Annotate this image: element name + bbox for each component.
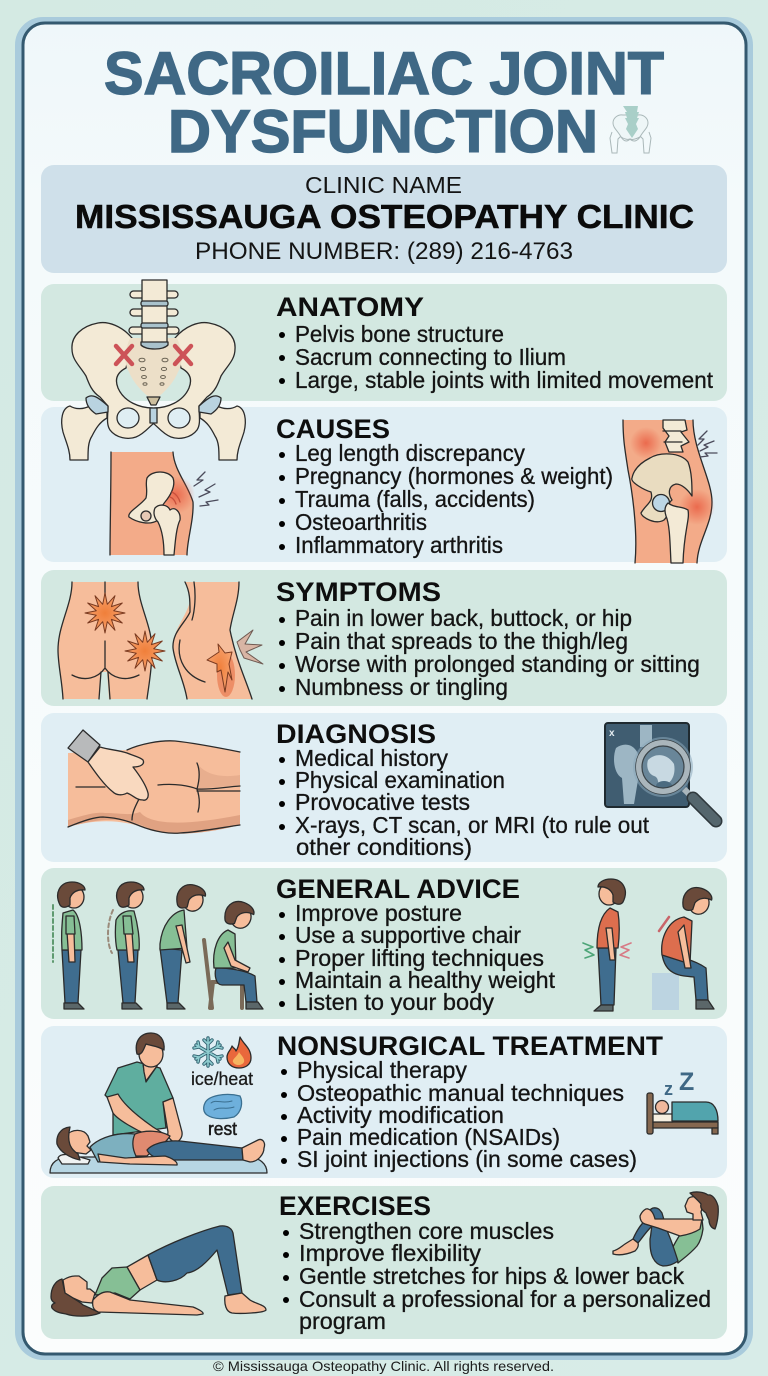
icon: snowflake [194, 1038, 222, 1066]
icon: sleeping in bed: z [664, 1079, 673, 1099]
icon: small pelvis [610, 106, 651, 153]
list: nonsurgical treatment: Activity modification [297, 1102, 504, 1128]
magnifier [633, 737, 716, 821]
hand [88, 747, 148, 800]
list: causes: Osteoarthritis [295, 509, 427, 535]
pain burst: lower back [85, 593, 125, 633]
illustration: hip side view, left [110, 452, 218, 555]
panel: clinic info [41, 165, 727, 273]
title: DYSFUNCTION [168, 98, 598, 165]
list: general advice [279, 900, 556, 1015]
title: SACROILIAC JOINT [104, 40, 664, 107]
illustration: x-ray with magnifying glass: x [609, 728, 615, 739]
figure: bending posture [160, 882, 207, 1009]
panel: anatomy [41, 284, 727, 401]
list: general advice: Proper lifting techniques [295, 945, 544, 971]
list: causes: Pregnancy (hormones & weight) [295, 463, 613, 489]
heading: causes: CAUSES [276, 414, 390, 444]
list: symptoms: Worse with prolonged standing or sitting [295, 651, 700, 677]
list: nonsurgical treatment: Osteopathic manual techniques [297, 1080, 624, 1106]
heading: diagnosis: DIAGNOSIS [276, 719, 436, 749]
illustration: pelvis anatomy [62, 280, 245, 460]
figure: seated on chair [204, 898, 263, 1009]
title [104, 40, 664, 165]
right half of pelvis [154, 323, 245, 460]
sleeve cuff [68, 730, 100, 762]
label: rest: rest [208, 1119, 237, 1139]
illustration: hip and spine, right [623, 420, 717, 563]
list: anatomy: Pelvis bone structure [295, 321, 504, 347]
clinic label: CLINIC NAME [305, 172, 462, 198]
clinic name: MISSISSAUGA OSTEOPATHY CLINIC [75, 198, 694, 235]
heading: anatomy: ANATOMY [276, 292, 424, 322]
list: causes: Trauma (falls, accidents) [295, 486, 535, 512]
lumbar spine [129, 280, 179, 349]
phone number: PHONE NUMBER: (289) 216-4763 [195, 238, 573, 265]
list: symptoms [279, 605, 700, 700]
list: anatomy: Sacrum connecting to Ilium [295, 344, 566, 370]
label: ice/heat: ice/heat [191, 1069, 253, 1089]
list: diagnosis: Medical history [295, 745, 448, 771]
treatment table [50, 1157, 267, 1173]
sacrum [125, 338, 182, 397]
icon: sleeping in bed [647, 1068, 718, 1134]
figure: upright posture [53, 882, 85, 1009]
list: symptoms: Pain in lower back, buttock, or hip [295, 605, 632, 631]
illustration: buttocks pain, back view [58, 582, 165, 699]
list: anatomy: Large, stable joints with limited movement [295, 367, 714, 393]
list: exercises: Consult a professional for a personalized [299, 1286, 711, 1312]
panel: nonsurgical treatment [41, 1026, 727, 1178]
footer: © Mississauga Osteopathy Clinic. All rights reserved. [213, 1358, 554, 1374]
list: exercises [283, 1218, 711, 1334]
list: exercises: program [299, 1308, 386, 1334]
list: diagnosis: X-rays, CT scan, or MRI (to rule out [295, 812, 650, 838]
panel: diagnosis [41, 713, 727, 862]
heading: symptoms: SYMPTOMS [276, 577, 441, 607]
list: symptoms: Pain that spreads to the thigh/leg [295, 628, 628, 654]
figure: standing with back pain [583, 879, 631, 1011]
list: diagnosis: other conditions) [296, 834, 472, 860]
figure: slouched posture [108, 882, 144, 1009]
patient [57, 1127, 265, 1165]
illustration: x-ray with magnifying glass [605, 723, 716, 821]
list: general advice: Use a supportive chair [295, 922, 521, 948]
red X markers [116, 346, 191, 364]
therapist [105, 1033, 182, 1142]
illustration: buttock pain, side view [173, 582, 263, 699]
panel: general advice [41, 868, 727, 1019]
illustration: hand examining lower back [68, 730, 240, 834]
lightning [194, 472, 218, 506]
list: nonsurgical treatment: Pain medication (NSAIDs) [297, 1124, 560, 1150]
list: general advice: Maintain a healthy weight [295, 967, 556, 993]
pain burst: hip [125, 631, 165, 671]
illustration: knee hug exercise [613, 1192, 718, 1266]
illustration: glute bridge [51, 1226, 266, 1316]
list: exercises: Gentle stretches for hips & lower back [299, 1263, 684, 1289]
left half of pelvis [62, 323, 153, 460]
panel: symptoms [41, 570, 727, 706]
list: exercises: Strengthen core muscles [299, 1218, 554, 1244]
list: diagnosis: Provocative tests [295, 789, 470, 815]
list: general advice: Listen to your body [295, 989, 495, 1015]
list: causes [279, 440, 613, 558]
icon: sleeping in bed: Z [679, 1068, 694, 1096]
list: nonsurgical treatment [281, 1057, 637, 1172]
icon: flame [227, 1037, 251, 1068]
panel: exercises [41, 1186, 727, 1339]
heading: general advice: GENERAL ADVICE [276, 874, 520, 904]
figure: poor lifting on box [652, 884, 714, 1010]
list: diagnosis [279, 745, 650, 860]
list: causes: Inflammatory arthritis [295, 532, 503, 558]
icon: rest pillow [204, 1094, 242, 1119]
list: causes: Leg length discrepancy [295, 440, 525, 466]
illustration: therapist treating patient [50, 1033, 267, 1173]
heading: nonsurgical treatment: NONSURGICAL TREATMENT [277, 1031, 664, 1061]
list: anatomy [279, 321, 714, 393]
list: symptoms: Numbness or tingling [295, 674, 508, 700]
heading: exercises: EXERCISES [279, 1191, 431, 1221]
list: nonsurgical treatment: Physical therapy [297, 1057, 468, 1083]
list: general advice: Improve posture [295, 900, 462, 926]
list: exercises: Improve flexibility [299, 1240, 482, 1266]
list: diagnosis: Physical examination [295, 767, 505, 793]
panel: causes [41, 407, 727, 562]
list: nonsurgical treatment: SI joint injections (in some cases) [297, 1146, 637, 1172]
